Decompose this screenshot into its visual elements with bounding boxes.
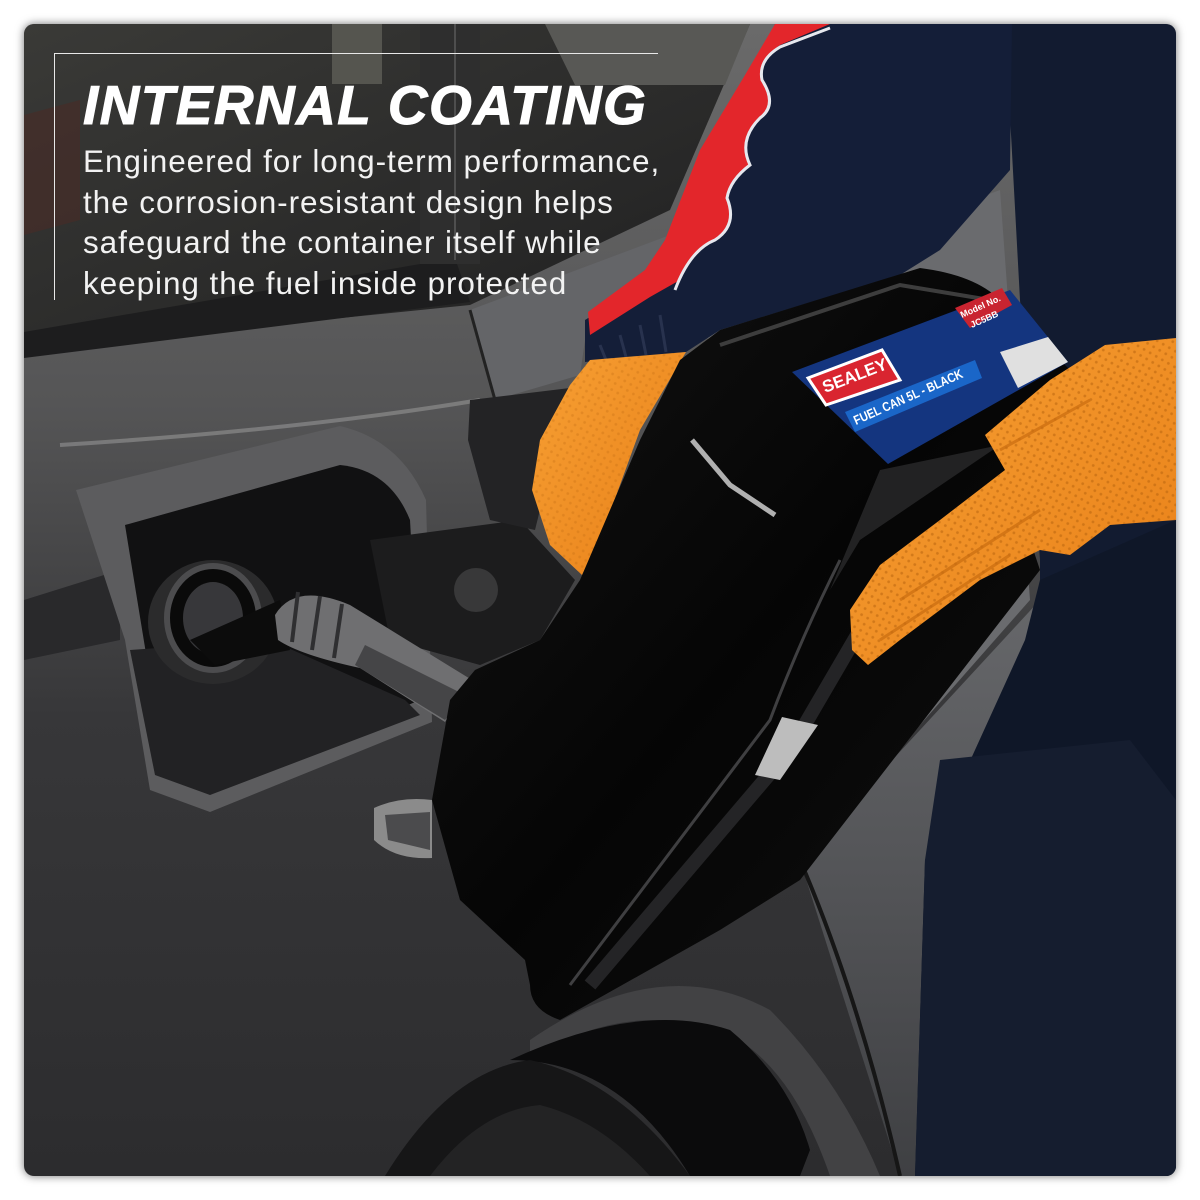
fuel filler recess — [76, 426, 432, 812]
title: INTERNAL COATING — [83, 74, 647, 136]
filler neck — [148, 560, 290, 684]
can label — [792, 288, 1068, 464]
left glove — [532, 352, 686, 575]
worker torso — [915, 24, 1176, 1176]
can label: JC5BB — [969, 308, 1000, 330]
can cap — [374, 799, 432, 858]
body text: safeguard the container itself while — [83, 224, 602, 260]
heading frame lines — [54, 53, 658, 300]
can label: SEALEY — [820, 354, 891, 397]
can label: FUEL CAN 5L - BLACK — [851, 366, 965, 428]
can label: Model No. — [959, 293, 1002, 320]
body text: keeping the fuel inside protected — [83, 265, 567, 301]
body text: Engineered for long-term performance, — [83, 143, 660, 179]
worker arm sleeve — [585, 24, 1012, 362]
fuel can — [432, 268, 1070, 1020]
body text — [83, 143, 660, 301]
body text: the corrosion-resistant design helps — [83, 184, 614, 220]
car window — [24, 24, 750, 358]
tyre and wheel arch — [385, 1020, 810, 1176]
right glove — [850, 338, 1176, 665]
spout — [275, 592, 472, 722]
flap hinge — [370, 388, 575, 665]
